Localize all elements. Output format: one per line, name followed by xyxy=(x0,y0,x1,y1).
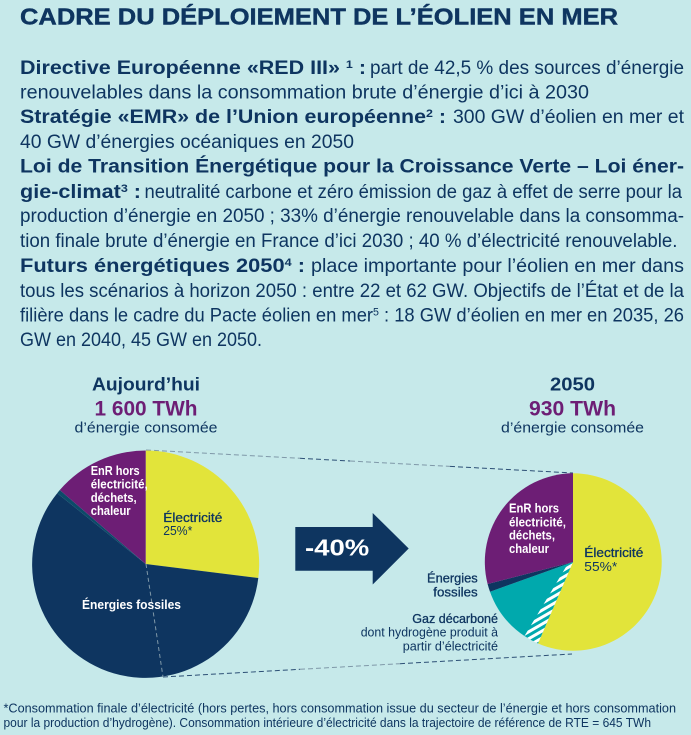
item: Loi de Transition Énergétique: production d’énergie en 2050 ; 33% d’énergie renouvelable dans la consomma- xyxy=(20,206,684,227)
label: électricité 55%: 55%* xyxy=(584,559,617,574)
label: EnR hors électricité: chaleur xyxy=(91,503,131,518)
slice: gaz décarboné, hydrogène hatched xyxy=(524,562,573,644)
slice: électricité xyxy=(146,450,259,578)
label: énergies fossiles: Énergies fossiles xyxy=(82,597,181,612)
item: Futurs énergétiques 2050 xyxy=(20,256,684,351)
label: EnR hors électricité xyxy=(91,463,148,518)
item: Futurs énergétiques 2050: : 18 GW d’éolien en mer en 2035, 26 xyxy=(379,306,684,327)
label: gaz décarboné: Gaz décarboné xyxy=(412,611,498,626)
item: Loi de Transition Énergétique: 3 xyxy=(121,183,128,195)
label: EnR hors électricité: déchets, xyxy=(509,528,555,542)
dashed guide inside pie xyxy=(146,564,163,677)
header: 2050: d’énergie consomée xyxy=(501,420,644,437)
item: Futurs énergétiques 2050: Futurs énergétiques 2050 xyxy=(20,256,250,277)
label: gaz décarboné: partir d’électricité xyxy=(403,639,498,654)
label: électricité 55% xyxy=(584,545,643,574)
item: Loi de Transition Énergétique: neutralité carbone et zéro émission de gaz à effet de serre pour la xyxy=(144,182,682,203)
item: Directive RED III: 1 xyxy=(346,59,353,71)
header: Aujourd'hui: d’énergie consomée xyxy=(74,420,218,437)
item: Stratégie EMR: 300 GW d’éolien en mer et xyxy=(453,107,685,128)
text block: policy framework xyxy=(20,58,685,351)
label: gaz décarboné: dont hydrogène produit à xyxy=(361,625,499,640)
item: Futurs énergétiques 2050: : xyxy=(292,256,305,277)
slice: EnR xyxy=(485,473,573,584)
label: EnR hors électricité: électricité, xyxy=(509,515,566,530)
item: Futurs énergétiques 2050: tous les scénarios à horizon 2050 : entre 22 et 62 GW. Objectifs de l’État et de la xyxy=(20,281,684,302)
footnote: *Consommation finale d’électricité (hors pertes, hors consommation issue du secteur de l’énergie et hors consommation xyxy=(4,701,676,716)
header: 2050: 2050 xyxy=(550,375,595,395)
item: Directive RED III: : xyxy=(353,58,366,79)
item: Stratégie EMR: 2 xyxy=(426,108,433,120)
pie chart: 2050 xyxy=(485,473,662,651)
label: EnR hors électricité: électricité, xyxy=(91,476,148,492)
label: EnR hors électricité: EnR hors xyxy=(91,463,140,478)
footnote: pour la production d’hydrogène). Consommation intérieure d’électricité dans la trajectoire de référence de RTE = 645 TWh xyxy=(4,715,651,730)
slice: gaz décarboné xyxy=(490,562,573,636)
item: Directive RED III xyxy=(20,58,684,104)
pie chart: today xyxy=(32,450,259,678)
slice: thin sliver xyxy=(57,490,146,564)
slice: énergies fossiles xyxy=(32,493,258,678)
dashed zoom lines linking the two pies xyxy=(146,450,573,677)
item: Futurs énergétiques 2050: filière dans le cadre du Pacte éolien en mer xyxy=(20,306,385,327)
item: Directive RED III: Directive Européenne «RED III» xyxy=(20,58,303,79)
item: Stratégie EMR: 40 GW d’énergies océaniques en 2050 xyxy=(20,132,354,153)
header: 2050: 930 TWh xyxy=(529,398,616,420)
header: Aujourd'hui: Aujourd’hui xyxy=(92,375,200,395)
arrow: -40%: -40% xyxy=(305,535,369,561)
header: 2050 xyxy=(501,375,644,437)
label: EnR hors électricité: EnR hors xyxy=(509,501,559,516)
label: gaz décarboné xyxy=(361,611,499,654)
slice: EnR xyxy=(60,450,146,564)
item: Futurs énergétiques 2050: 4 xyxy=(285,257,293,269)
header: Aujourd'hui xyxy=(74,375,218,437)
label: électricité 25%: Électricité xyxy=(163,510,222,525)
item: Directive RED III: renouvelables dans la consommation brute d’énergie d’ici à 2030 xyxy=(20,83,589,104)
title: CADRE DU DÉPLOIEMENT DE L’ÉOLIEN EN MER xyxy=(20,2,618,30)
label: énergies fossiles: fossiles xyxy=(433,585,478,600)
label: énergies fossiles xyxy=(427,571,478,600)
slice: électricité xyxy=(538,473,662,651)
item: Futurs énergétiques 2050: GW en 2040, 45 GW en 2050. xyxy=(20,330,262,351)
label: EnR hors électricité: chaleur xyxy=(509,541,549,556)
item: Stratégie EMR: Stratégie «EMR» de l’Union européenne xyxy=(20,107,380,128)
item: Stratégie EMR: : xyxy=(433,107,446,128)
label: électricité 25% xyxy=(163,510,222,538)
item: Futurs énergétiques 2050: place importante pour l’éolien en mer dans xyxy=(311,256,684,277)
item: Loi de Transition Énergétique: : xyxy=(128,182,141,203)
label: énergies fossiles: Énergies xyxy=(427,571,478,586)
label: EnR hors électricité xyxy=(509,501,566,556)
header: Aujourd'hui: 1 600 TWh xyxy=(94,398,198,420)
item: Loi de Transition Énergétique: gie-climat xyxy=(20,182,109,203)
label: électricité 25%: 25%* xyxy=(163,523,192,538)
label: EnR hors électricité: déchets, xyxy=(91,490,137,505)
item: Directive RED III: part de 42,5 % des sources d’énergie xyxy=(370,58,684,79)
item: Stratégie EMR xyxy=(20,107,685,153)
footnote xyxy=(4,701,676,730)
item: Loi de Transition Énergétique xyxy=(20,156,684,252)
slice: énergies fossiles xyxy=(488,562,573,592)
item: Loi de Transition Énergétique: Loi de Transition Énergétique pour la Croissance Verte – Loi éner- xyxy=(20,156,684,178)
item: Futurs énergétiques 2050: 5 xyxy=(373,307,379,319)
item: Loi de Transition Énergétique: tion finale brute d’énergie en France d’ici 2030 ; 40 % d’électricité renouvelable. xyxy=(20,231,678,252)
label: électricité 55%: Électricité xyxy=(584,545,643,560)
arrow: -40% xyxy=(295,513,409,584)
